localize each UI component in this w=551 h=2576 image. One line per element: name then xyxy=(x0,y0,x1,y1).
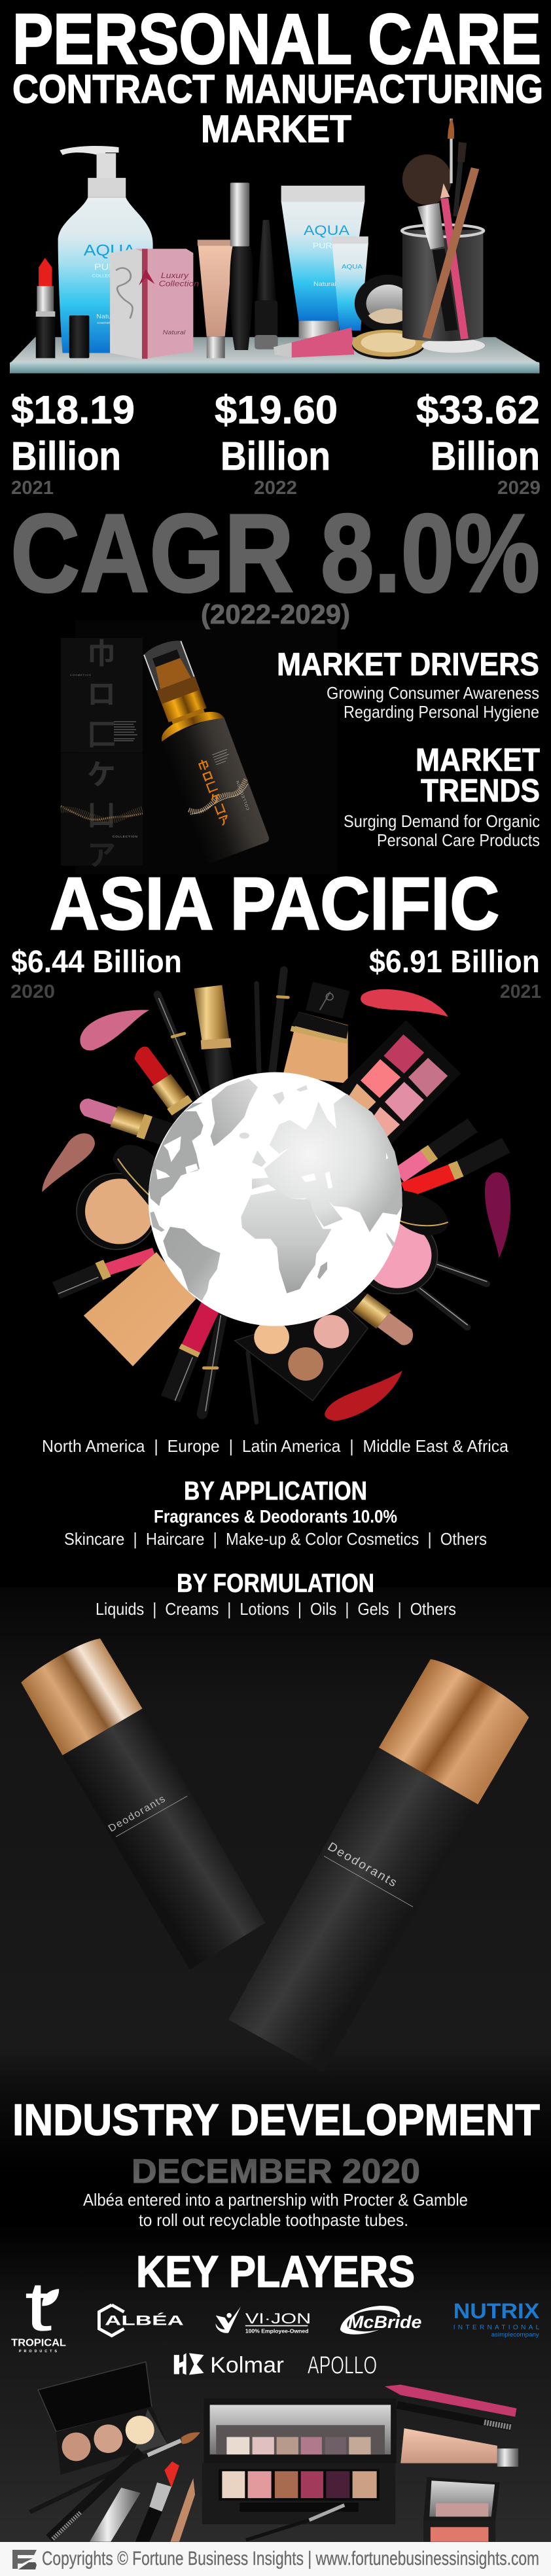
title: MARKET xyxy=(201,108,351,150)
land: South America xyxy=(163,1227,221,1301)
lipstick: red xyxy=(128,1042,204,1131)
market size 2029 xyxy=(416,388,541,499)
dark packaging box xyxy=(61,638,143,872)
big eyeshadow palette xyxy=(202,2399,397,2540)
foundation bottle xyxy=(283,981,349,1084)
serum bottle: 凵 xyxy=(213,802,228,817)
gift box xyxy=(110,249,199,359)
lipstick: pink xyxy=(75,1094,177,1148)
right tube: Deodorants xyxy=(325,1839,400,1890)
pump bottle: cosmetics xyxy=(97,321,116,325)
thin brushes and pencils xyxy=(158,970,487,1422)
segment: by formulation: BY FORMULATION xyxy=(177,1569,374,1598)
right tube xyxy=(228,1659,529,2072)
pump bottle: AQUA xyxy=(84,241,136,259)
key players logos and cosmetics xyxy=(11,2267,540,2542)
logo: McBride: McBride xyxy=(348,2312,422,2332)
segment: by formulation xyxy=(96,1569,456,1619)
market trends: TRENDS xyxy=(421,773,540,809)
image: serum bottle and box xyxy=(61,620,337,874)
footer bar xyxy=(0,2542,551,2576)
regional value 2020 xyxy=(10,945,182,1002)
list of other regions: North America | Europe | Latin America | Middle East & Africa xyxy=(42,1436,509,1456)
regional value 2021: 2021 xyxy=(500,981,541,1002)
gift box: Collection xyxy=(159,279,199,288)
dark packaging box: ア xyxy=(87,839,116,872)
serum bottle: 匚 xyxy=(204,780,219,796)
contour palette xyxy=(38,2362,168,2475)
mascara gold cap xyxy=(194,985,236,1090)
regional heading: ASIA PACIFIC xyxy=(50,862,499,945)
beige tube xyxy=(198,239,234,358)
large aqua tube xyxy=(281,186,364,338)
logo: Nutrix: INTERNATIONAL xyxy=(453,2324,540,2331)
lipstick and pencil xyxy=(135,2461,195,2542)
glass shelf xyxy=(10,337,539,373)
market size 2029: Billion xyxy=(431,434,540,478)
CAGR heading: (2022-2029) xyxy=(201,599,350,629)
pump bottle xyxy=(58,146,153,353)
logo: Tropical Products xyxy=(11,2267,66,2354)
serum bottle: ロ xyxy=(200,769,215,785)
segment: by formulation: Liquids | Creams | Lotions | Oils | Gels | Others xyxy=(96,1599,456,1619)
market size 2029: $33.62 xyxy=(416,388,540,432)
small aqua tube: AQUA xyxy=(342,264,363,270)
market trends xyxy=(344,743,540,850)
serum bottle: COLLECTION xyxy=(236,779,251,811)
logo: Tropical Products: t xyxy=(25,2267,52,2346)
dark packaging box: ロ xyxy=(87,679,116,711)
pink tube xyxy=(274,328,354,357)
segment: by application: BY APPLICATION xyxy=(184,1477,367,1506)
land: Britain and Iceland xyxy=(240,1085,308,1167)
logo: Vi-Jon xyxy=(216,2306,311,2334)
blush compact xyxy=(423,2477,500,2542)
serum bottle xyxy=(130,633,270,864)
logo: Nutrix: NUTRIX xyxy=(453,2299,540,2323)
land: North America xyxy=(149,1103,204,1206)
segment: by application xyxy=(64,1477,487,1549)
large aqua tube: Natural xyxy=(313,281,336,288)
land: Southeast Asia xyxy=(386,1232,395,1246)
dark packaging box: 巾 xyxy=(87,638,116,670)
gift box: Natural xyxy=(163,330,186,336)
dark packaging box: ケ xyxy=(87,759,116,791)
key players heading: KEY PLAYERS xyxy=(136,2247,415,2297)
logo: Albea xyxy=(99,2305,184,2336)
makeup swatches xyxy=(42,989,510,1420)
logo: Kolmar xyxy=(174,2353,284,2378)
segment: by application: Fragrances & Deodorants 10.0% xyxy=(154,1506,397,1526)
market size 2021: 2021 xyxy=(11,478,54,499)
dark packaging box: COLLECTION xyxy=(113,835,138,838)
development date: DECEMBER 2020 xyxy=(132,2153,420,2191)
peach tube xyxy=(400,2428,518,2467)
market size 2022: 2022 xyxy=(254,478,297,499)
land: Greenland xyxy=(211,1078,258,1146)
land: Central America xyxy=(150,1212,165,1232)
pump bottle: COLLECTION xyxy=(92,274,124,278)
logo: Vi-Jon: VI·JON xyxy=(245,2310,311,2327)
development description: to roll out recyclable toothpaste tubes. xyxy=(139,2210,408,2230)
title xyxy=(12,0,543,150)
serum bottle: ケ xyxy=(209,791,223,806)
regional value 2021: $6.91 Billion xyxy=(369,945,540,979)
logo: McBride xyxy=(340,2306,422,2335)
eyeliner xyxy=(255,220,277,349)
logo: Fortune Business Insights xyxy=(12,2550,37,2569)
lipstick: nude xyxy=(338,1282,419,1350)
land: Madagascar xyxy=(317,1262,327,1279)
eyeshadow palette xyxy=(339,1020,461,1145)
pencils xyxy=(385,2384,516,2427)
development description: Albéa entered into a partnership with Procter & Gamble xyxy=(83,2190,468,2210)
bottom palette xyxy=(235,1305,368,1401)
logo: Tropical Products: PRODUCTS xyxy=(19,2350,59,2354)
market size 2022 xyxy=(215,388,338,499)
serum bottle: 巾 xyxy=(196,758,211,773)
lip glosses right xyxy=(399,1125,506,1190)
illustration: deodorant tubes xyxy=(21,1638,529,2072)
segment: by application: Skincare | Haircare | Make-up & Color Cosmetics | Others xyxy=(64,1529,487,1549)
land: Eurasia xyxy=(252,1094,402,1232)
dark packaging box: 凵 xyxy=(87,800,116,832)
market size 2029: 2029 xyxy=(497,478,541,499)
powder compact xyxy=(352,330,425,359)
logo: Nutrix: asimplecompany xyxy=(491,2331,539,2338)
lipstick xyxy=(36,258,89,358)
logo: Apollo: APOLLO xyxy=(308,2351,377,2379)
development description xyxy=(83,2190,468,2230)
brush cup xyxy=(402,118,485,353)
illustration: cosmetics on glass shelf xyxy=(10,118,539,373)
compact: tan powder xyxy=(77,1145,157,1250)
dark packaging box: 匚 xyxy=(87,719,116,751)
land: Africa xyxy=(241,1190,332,1294)
silver tube xyxy=(90,2488,141,2542)
illustration: cosmetics around the globe xyxy=(42,970,510,1422)
market size 2021 xyxy=(11,388,135,499)
compact: pink blush xyxy=(357,1190,448,1294)
regional value 2020: $6.44 Billion xyxy=(11,945,182,979)
large aqua tube: AQUA xyxy=(304,222,350,238)
lip gloss lower left xyxy=(56,1254,154,1294)
logo: Vi-Jon: 100% Employee-Owned xyxy=(245,2328,309,2334)
small aqua tube xyxy=(332,236,368,330)
mirror compact xyxy=(355,275,422,332)
serum bottle: ア xyxy=(217,813,232,828)
regional value 2021 xyxy=(369,945,541,1002)
market size 2022: $19.60 xyxy=(215,388,338,432)
logo: Kolmar: Kolmar xyxy=(210,2353,284,2378)
pump bottle: Natural xyxy=(96,313,119,321)
foundation tube xyxy=(84,1252,196,1366)
logo: Albea: ALBÉA xyxy=(105,2312,184,2329)
market size 2021: Billion xyxy=(11,434,121,478)
market size 2022: Billion xyxy=(221,434,330,478)
large aqua tube: PURE xyxy=(313,241,338,250)
gift box: Luxury xyxy=(161,271,189,280)
regional value 2020: 2020 xyxy=(10,981,55,1002)
left tube: Deodorants xyxy=(107,1793,168,1834)
lip gloss bottom xyxy=(170,1305,211,1401)
mascara xyxy=(230,183,253,350)
market size 2021: $18.19 xyxy=(11,388,135,432)
dark packaging box: COSMETICS xyxy=(70,673,92,677)
brushes xyxy=(30,2432,200,2539)
logo: Tropical Products: TROPICAL xyxy=(11,2337,66,2349)
pump bottle: PURE xyxy=(94,262,124,272)
market trends: MARKET xyxy=(416,743,540,778)
globe xyxy=(149,1072,402,1326)
left tube xyxy=(21,1638,265,1969)
logo: Nutrix xyxy=(453,2299,540,2338)
market drivers xyxy=(277,647,539,722)
